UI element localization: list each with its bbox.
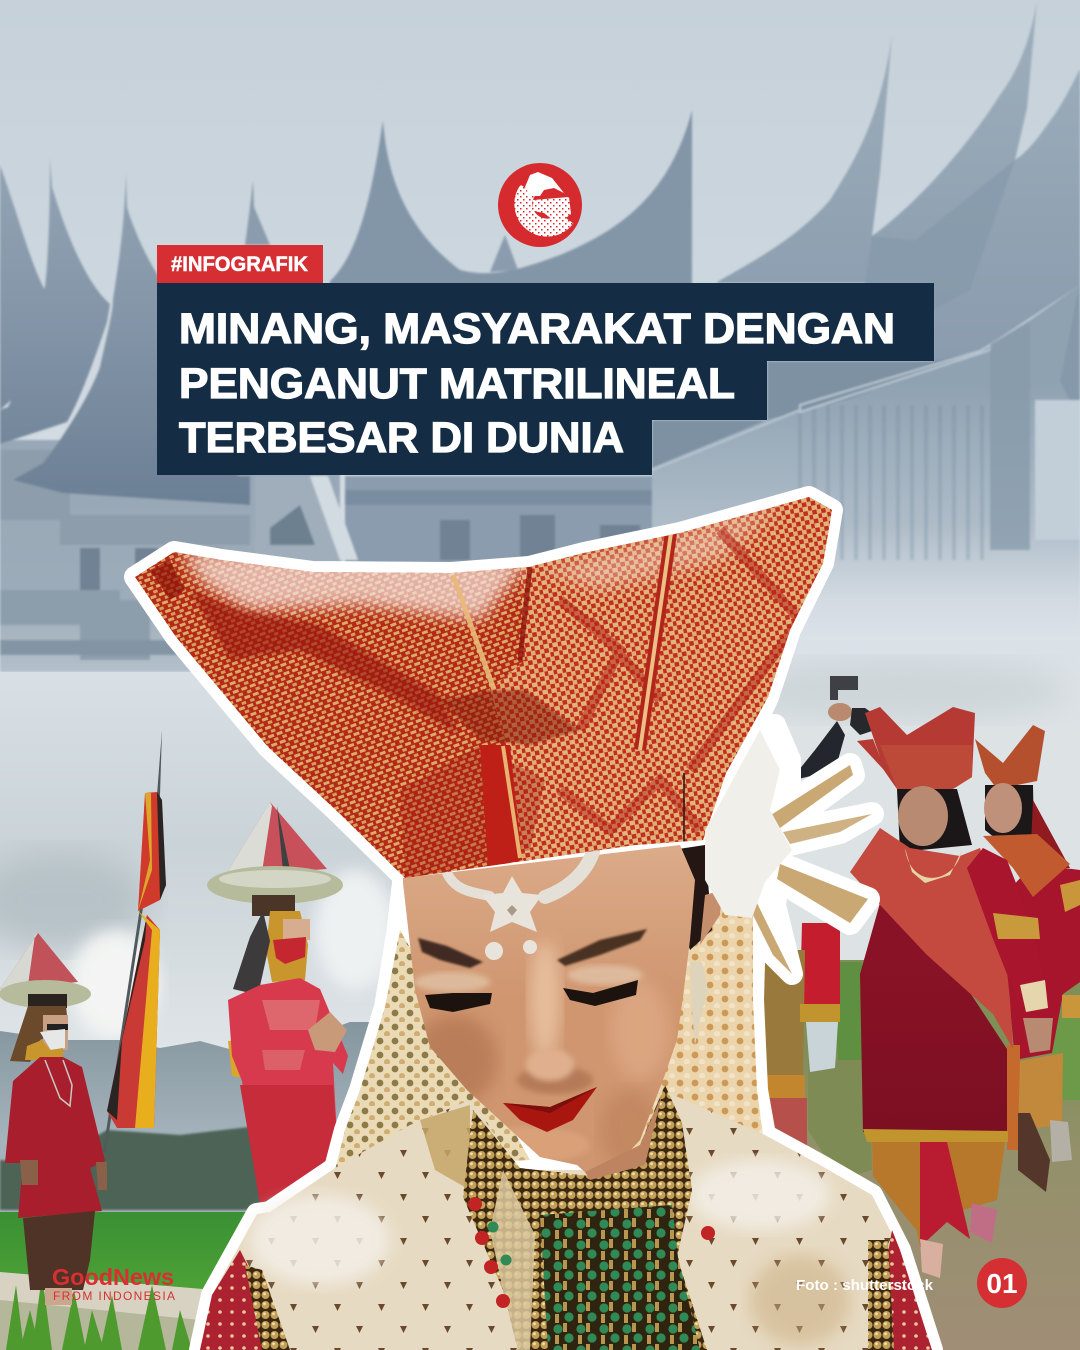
veil xyxy=(335,845,765,1190)
earring xyxy=(690,962,708,1045)
white cut-out outline xyxy=(135,497,932,1350)
background: traditional Minang rumah gadang xyxy=(0,0,1080,672)
woman with tray hat, white mask xyxy=(0,933,107,1305)
photo credit: Foto : shutterstock xyxy=(796,1278,934,1294)
title block: PENGANUT MATRILINEAL xyxy=(179,360,735,408)
title block: TERBESAR DI DUNIA xyxy=(179,414,624,462)
right scene: sky, grass, path and photographer xyxy=(730,660,1080,1350)
gold beaded necklace with green and red stones xyxy=(463,1085,715,1350)
woman in foreground, red hat xyxy=(850,707,1053,1278)
flag pole and Minang flag xyxy=(103,730,166,1152)
brand mark: GoodNews from Indonesia: FROM INDONESIA xyxy=(53,1289,175,1303)
title block: MINANG, MASYARAKAT DENGAN xyxy=(179,305,895,353)
brand mark: GoodNews from Indonesia: GoodNews xyxy=(52,1264,174,1290)
tag: #INFOGRAFIK xyxy=(157,245,323,283)
woman in background, far right xyxy=(975,725,1080,1192)
woman at edge behind main figure xyxy=(758,923,840,1147)
brand mark: GoodNews from Indonesia xyxy=(52,1264,175,1303)
facial features xyxy=(414,929,647,1132)
title block xyxy=(157,283,934,475)
logo: red circle with Garuda G emblem xyxy=(498,163,582,247)
woman with tray hat, red mask xyxy=(207,802,348,1204)
page number badge xyxy=(977,1258,1027,1308)
white flower with gold spikes xyxy=(705,730,872,974)
blouse xyxy=(200,1090,932,1350)
tag: #INFOGRAFIK: #INFOGRAFIK xyxy=(171,253,308,276)
forehead jewellery xyxy=(447,852,593,960)
left scene: sky, mountains and rice field xyxy=(0,672,420,1350)
page number badge: 01 xyxy=(986,1268,1018,1299)
main figure: woman in Minang headdress with white cut-out outline xyxy=(130,490,932,1350)
headdress: woven red and gold fabric xyxy=(130,490,840,890)
face and neck xyxy=(403,845,695,1180)
